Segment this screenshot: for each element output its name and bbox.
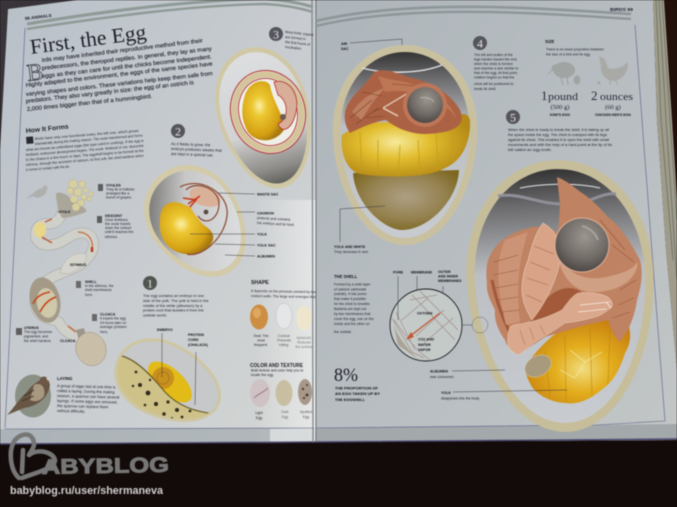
color and texture heading: Both texture and color help you to bbox=[251, 368, 303, 372]
step 4 uterus: the shell hardens. bbox=[24, 339, 52, 343]
cloaca bbox=[68, 326, 76, 332]
color eggs bbox=[250, 379, 312, 407]
embryo bbox=[345, 70, 462, 134]
eggshell heading and text: cover the egg, one on the bbox=[334, 317, 374, 321]
large egg stage 5 illustration bbox=[461, 155, 661, 437]
step 3 shell: SHELL bbox=[85, 280, 98, 284]
shell diagram labels: OXYGEN bbox=[417, 312, 433, 316]
kiwi egg stat: 1 bbox=[541, 88, 548, 103]
step 4 uterus: The egg becomes bbox=[24, 330, 52, 334]
albumen label: was consumed. bbox=[430, 375, 454, 379]
color captions bbox=[255, 410, 312, 420]
step 5 number: 5 bbox=[510, 110, 516, 124]
step 3 text bbox=[285, 30, 314, 51]
egg 1 labels: (CHALAZA) bbox=[188, 343, 209, 347]
air sac label bbox=[341, 39, 402, 52]
laying text bbox=[57, 376, 120, 414]
intro paragraph: eggs as they can care for until the chicks become independent. bbox=[42, 54, 213, 80]
step 3 number bbox=[269, 27, 283, 42]
eggshell heading and text: the outside. bbox=[334, 330, 352, 334]
step 5 text bbox=[508, 128, 612, 152]
laying text: without difficulty. bbox=[57, 408, 85, 414]
egg 2 labels: YOLK SAC bbox=[257, 244, 276, 248]
yolk and white label: YOLK AND WHITE bbox=[334, 245, 366, 249]
chicken egg stat: (60 g) bbox=[605, 104, 621, 111]
chicken egg stat bbox=[591, 88, 633, 117]
watermark url: babyblog.ru/user/shermaneva bbox=[10, 485, 164, 497]
step 3 text: incubation. bbox=[285, 45, 302, 51]
step 1 text bbox=[143, 293, 209, 318]
yolk and white label: They decrease in size. bbox=[334, 250, 369, 254]
remaining albumen bbox=[521, 350, 555, 382]
step 4 text: The bill and scales of the bbox=[474, 53, 513, 57]
funnel bbox=[56, 193, 86, 218]
step 4 uterus: UTERUS bbox=[24, 326, 39, 330]
watermark logo bbox=[11, 435, 169, 479]
step 2 text bbox=[171, 141, 223, 157]
albumen label bbox=[430, 370, 505, 379]
step 2 descent: isthmus. bbox=[105, 235, 118, 239]
step 4 text bbox=[474, 53, 518, 91]
step 2 descent bbox=[97, 214, 133, 239]
How It Forms text: to the cloaca in a few hours or days. The eggshell begins to be formed at the bbox=[26, 149, 144, 162]
step 1 text: protein cord that isolates it from the bbox=[143, 308, 204, 312]
large egg stage 4 illustration bbox=[333, 45, 477, 245]
shape captions: most bbox=[257, 338, 265, 342]
page bottom edge bbox=[0, 439, 677, 444]
step 2 text: As it feeds to grow, the bbox=[171, 141, 210, 147]
egg 2 labels bbox=[190, 192, 295, 258]
eggshell heading and text: Bacteria are kept out bbox=[334, 307, 366, 311]
diagram labels bbox=[58, 210, 87, 343]
air sac line bbox=[498, 194, 616, 204]
yolk and white label bbox=[334, 206, 385, 254]
laying text: the sparrow can replace them bbox=[57, 403, 108, 409]
step 5 text: When the chick is ready to break the shell, it is taking up all bbox=[508, 128, 609, 132]
How It Forms text: isthmus, through the secretion of calcium. At first soft, the shell hardens when bbox=[26, 154, 144, 167]
step 2 descent: Once fertilized, bbox=[105, 218, 128, 222]
egg 2 labels: protects and contains bbox=[257, 216, 291, 222]
step 3 shell: form. bbox=[85, 293, 93, 297]
step 2 descent: the ovule travels bbox=[105, 222, 131, 226]
head bbox=[558, 245, 638, 292]
air sac label: AIR bbox=[341, 42, 348, 46]
shell diagram labels: MEMBRANE bbox=[411, 270, 433, 274]
step 5 cloaca: 24 hours later on bbox=[100, 321, 126, 325]
shape heading and text: It depends on the pressure exerted by the bbox=[251, 289, 316, 294]
laid egg bbox=[71, 328, 111, 370]
header stripes left page bbox=[27, 0, 313, 29]
step 1 text: side of the yolk. The yolk is held in the bbox=[143, 298, 209, 303]
step 5 text: against its chest. This enables it to open the shell with small bbox=[508, 138, 609, 142]
intro paragraph: predators. They also vary greatly in size: the egg of an ostrich is bbox=[26, 80, 194, 105]
step 3 text: Most birds' organs bbox=[285, 30, 314, 37]
egg stage 3 illustration bbox=[202, 37, 328, 199]
sparrow illustration bbox=[7, 374, 51, 418]
intro paragraph: irds may have inherited their reproductive method from their bbox=[42, 38, 203, 64]
shape heading and text: oviduct walls. The large end emerges first. bbox=[251, 294, 317, 299]
shape heading and text: SHAPE bbox=[251, 280, 269, 286]
intro paragraph: B bbox=[26, 59, 45, 87]
step 1 text: The egg contains an embryo in one bbox=[143, 293, 204, 298]
step 3 text: the first hours of bbox=[285, 40, 310, 47]
uterus bbox=[25, 274, 65, 326]
shell diagram labels bbox=[393, 270, 462, 352]
8 percent stat: AN EGG TAKEN UP BY bbox=[335, 392, 381, 396]
shape captions: Oval: The bbox=[253, 334, 269, 338]
step 4 text: that of the egg. At that point, bbox=[474, 71, 518, 75]
dark strip left of page bbox=[0, 0, 77, 150]
step 5 cloaca: average (chicken bbox=[100, 325, 127, 329]
step 5 cloaca: CLOACA bbox=[100, 312, 116, 316]
How It Forms text: it comes in contact with the air. bbox=[26, 165, 70, 172]
How It Forms text: fertilized, embryonic development begins. The ovule, fertilized or not, descends bbox=[26, 144, 144, 157]
8 percent stat: THE PROPORTION OF bbox=[335, 386, 379, 390]
header stripes right page bbox=[316, 7, 631, 26]
page number right: BIRDS 99 bbox=[610, 7, 634, 12]
step 4 text: and reaches a size similar to bbox=[474, 66, 518, 70]
step 5 cloaca: hen). bbox=[100, 330, 108, 334]
intro paragraph: varying shapes and colors. These variations help keep them safe from bbox=[26, 71, 213, 98]
egg 2 labels: the embryo and its food. bbox=[257, 221, 295, 227]
step 2 text: embryo produces wastes that bbox=[171, 146, 223, 153]
shell diagram labels: WATER bbox=[418, 343, 431, 347]
icon: small bird bbox=[25, 185, 48, 200]
intro paragraph: predecessors, the theropod reptiles. In general, they lay as many bbox=[42, 46, 212, 72]
step 4 text: chick will be positioned to bbox=[474, 82, 514, 86]
step 3 shell: shell membranes bbox=[85, 288, 112, 292]
kiwi egg stat: KIWI'S EGG bbox=[550, 113, 570, 117]
laying text: A group of eggs laid at one time is bbox=[57, 383, 116, 390]
step 2 number bbox=[171, 124, 185, 138]
shell magnifier circle bbox=[390, 289, 488, 361]
color captions: Dark bbox=[281, 410, 289, 414]
shell diagram labels: PORE bbox=[393, 270, 404, 274]
eggshell heading and text: Formed by a solid layer bbox=[334, 282, 371, 286]
step 4 text: when the chick is formed bbox=[474, 62, 513, 66]
color and texture heading bbox=[250, 363, 303, 377]
8 percent stat: THE EGGSHELL bbox=[335, 398, 366, 402]
shape captions: frequent. bbox=[254, 343, 268, 347]
step 5 text: the space inside the egg. The chick is cramped with its legs bbox=[508, 133, 607, 137]
eggshell heading and text bbox=[334, 274, 374, 334]
right book page bbox=[316, 0, 677, 442]
isthmus bbox=[60, 253, 86, 274]
color captions: Egg bbox=[256, 416, 262, 420]
step 1 ovules: bunch of grapes. bbox=[106, 196, 132, 200]
chick body bbox=[486, 177, 642, 355]
shell diagram labels: VAPOR bbox=[418, 348, 431, 352]
book page stack at right edge bbox=[653, 0, 677, 380]
laying text: season, a sparrow can have several bbox=[57, 393, 120, 400]
watermark logo: ABYBLOG bbox=[42, 454, 169, 479]
kiwi egg stat bbox=[541, 88, 579, 117]
chicken egg stat: 2 bbox=[591, 88, 598, 103]
icon: chicken bbox=[597, 57, 628, 85]
size heading and text: the size of a bird and its egg. bbox=[546, 52, 591, 56]
egg 1 labels: PROTEIN bbox=[188, 333, 204, 337]
yolk in tube bbox=[34, 222, 46, 238]
yolk label bbox=[441, 390, 567, 400]
eggshell heading and text: (calcite). It has pores bbox=[334, 292, 367, 296]
egg 2 labels: WASTE SAC bbox=[257, 192, 279, 196]
intro paragraph bbox=[26, 38, 213, 113]
step 4 text: legs harden toward the end, bbox=[474, 58, 517, 62]
albumen bbox=[353, 170, 459, 230]
egg 2 labels: CHORION bbox=[257, 212, 274, 216]
diagram labels: CLOACA bbox=[60, 339, 76, 343]
step 1 text: middle of the white (albumen) by a bbox=[143, 303, 203, 308]
intro paragraph: 2,000 times bigger than that of a hummingbird. bbox=[27, 94, 153, 113]
title: First, the Egg bbox=[29, 20, 148, 59]
step 2 text: are kept in a special sac. bbox=[171, 151, 214, 157]
step 3 shell: In the isthmus, the bbox=[85, 284, 114, 288]
shape heading and text bbox=[251, 280, 317, 299]
kiwi egg stat: pound bbox=[548, 92, 579, 103]
eggshell heading and text: that make it possible bbox=[334, 297, 366, 301]
wing bbox=[522, 223, 559, 320]
yolk bbox=[525, 318, 630, 403]
left book page bbox=[0, 0, 316, 444]
laying text: LAYING bbox=[57, 376, 72, 381]
egg stage 2 illustration bbox=[125, 147, 269, 297]
step 4 number bbox=[473, 36, 487, 50]
yolk bbox=[342, 114, 470, 176]
step 1 text: outside world. bbox=[143, 312, 167, 318]
shell diagram labels: CO2 AND bbox=[418, 338, 434, 342]
egg 1 labels: CORD bbox=[188, 338, 199, 342]
eggshell heading and text: THE SHELL bbox=[334, 274, 358, 279]
step 1 ovules: arranged like a bbox=[106, 192, 129, 196]
egg 2 labels: ALBUMEN bbox=[257, 254, 275, 258]
8 percent stat: 8% bbox=[334, 365, 358, 386]
color captions: Egg bbox=[282, 415, 288, 419]
step 5 text: bill called an egg tooth. bbox=[508, 148, 552, 152]
How It Forms text bbox=[26, 129, 144, 172]
size heading and text: SIZE bbox=[545, 39, 555, 44]
step 1 number: 1 bbox=[147, 276, 153, 290]
step 1 ovules: They lie in follicles bbox=[106, 188, 135, 192]
shape captions: Prevents bbox=[277, 338, 291, 342]
step 1 ovules bbox=[98, 184, 135, 200]
diagram labels: ISTHMUS bbox=[70, 263, 87, 267]
page number left: 98 ANIMALS bbox=[25, 13, 52, 21]
intro paragraph: Highly adapted to the environment, the eggs of the same species have bbox=[26, 61, 213, 89]
air sac label: SAC bbox=[341, 47, 349, 51]
step 3 text: are formed in bbox=[285, 35, 306, 41]
size heading and text: There is no exact proportion between bbox=[546, 48, 604, 52]
step 5 cloaca: It expels the egg bbox=[100, 316, 126, 320]
step 5 number bbox=[506, 110, 520, 124]
icon: kiwi bbox=[545, 62, 580, 85]
step 2 descent: until it reaches the bbox=[105, 230, 133, 234]
How It Forms text: dramatically during the mating season. The ovule transformed and forms bbox=[35, 134, 143, 146]
chicken egg stat: CHICKEN HEN'S EGG bbox=[595, 113, 631, 117]
yolk label: YOLK bbox=[441, 391, 451, 395]
egg 2 labels: YOLK bbox=[257, 232, 267, 236]
reproductive tract diagram bbox=[25, 180, 111, 370]
step 4 uterus: pigmented, and bbox=[24, 334, 48, 338]
laying text: called a laying. During the mating bbox=[57, 388, 115, 395]
color captions: Light bbox=[255, 411, 263, 415]
How It Forms heading: How It Forms bbox=[25, 123, 69, 135]
step 4 text: break its shell. bbox=[474, 87, 496, 91]
egg 1 labels bbox=[157, 328, 209, 405]
shape captions bbox=[253, 334, 313, 349]
eggshell heading and text: for the chick to breathe. bbox=[334, 302, 371, 306]
step 5 text: movements and with the help of a hard point at the tip of its bbox=[508, 143, 612, 147]
diagram labels: OVULE bbox=[58, 210, 71, 214]
eggshell heading and text: of calcium carbonate bbox=[334, 288, 366, 292]
egg 1 labels: EMBRYO bbox=[157, 328, 173, 332]
step 5 cloaca bbox=[92, 312, 127, 334]
step 2 number: 2 bbox=[175, 124, 181, 138]
color captions: Egg bbox=[303, 415, 309, 419]
shape captions: Conical: bbox=[278, 334, 290, 338]
color and texture heading: locate the egg. bbox=[251, 373, 274, 377]
shape eggs bbox=[250, 303, 312, 330]
yolk label: disappears into the body. bbox=[441, 396, 480, 400]
eggshell heading and text: by two membranes that bbox=[334, 312, 370, 316]
color captions: Spotted bbox=[300, 410, 312, 414]
shape captions: rolling. bbox=[279, 343, 289, 347]
size heading and text bbox=[545, 39, 604, 56]
step 3 number: 3 bbox=[273, 28, 279, 42]
step 1 ovules: OVULES bbox=[106, 184, 121, 188]
step 2 descent: DESCENT bbox=[105, 214, 123, 218]
albumen label: ALBUMEN bbox=[430, 370, 448, 374]
laying text: layings. If some eggs are removed, bbox=[57, 398, 118, 405]
shell diagram labels: MEMBRANES bbox=[438, 279, 462, 283]
shape captions: Spheroid: bbox=[297, 336, 312, 340]
eggshell heading and text: inside and the other on bbox=[334, 322, 370, 326]
shell diagram labels: OUTER bbox=[438, 270, 451, 274]
step 4 uterus bbox=[16, 326, 52, 343]
egg stage 1 cutaway bbox=[114, 338, 222, 422]
chicken egg stat: ounces bbox=[600, 92, 633, 103]
shape captions: Reduces bbox=[297, 340, 311, 344]
ovules cluster bbox=[66, 180, 93, 211]
kiwi egg stat: (500 g) bbox=[551, 104, 569, 111]
How It Forms text: what are known as unfertilized eggs (the type used in cooking). If the egg is bbox=[26, 139, 144, 152]
step 4 text: rotation begins so that the bbox=[474, 76, 514, 80]
leg and foot bbox=[508, 293, 612, 355]
step 2 descent: down the oviduct bbox=[105, 226, 131, 230]
shell diagram labels: AND INNER bbox=[438, 274, 458, 278]
step 1 number bbox=[143, 276, 157, 290]
step 4 number: 4 bbox=[477, 36, 483, 50]
How It Forms text: Birds have only one functional ovary, the left one, which grows bbox=[35, 129, 139, 141]
step 3 shell bbox=[76, 280, 114, 297]
color and texture heading: COLOR AND TEXTURE bbox=[250, 363, 303, 369]
shape captions: the surface bbox=[295, 345, 313, 349]
8 percent stat bbox=[334, 365, 381, 402]
